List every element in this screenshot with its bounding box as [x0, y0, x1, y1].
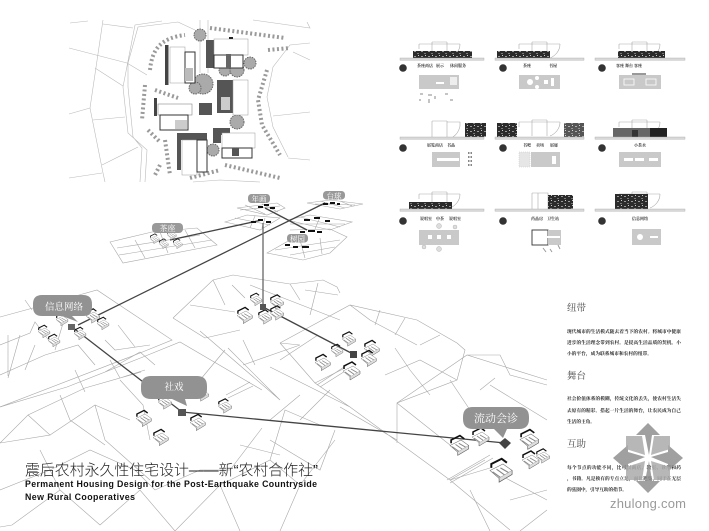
watermark: star: [613, 423, 683, 493]
panel 8: 药品房: [531, 215, 543, 221]
panel 7: [399, 192, 484, 252]
panel 7: 说唱室: [449, 215, 461, 221]
panel 5: 卖场: [536, 142, 544, 148]
text block: 纽带: 纽带: [567, 302, 586, 314]
text block: 舞台: 生活的主角。: [567, 418, 595, 425]
text block: 互助: 每个节点的功能不同，比可以商店、教室、诊所和药: [567, 464, 681, 471]
text block: 互助: 互助: [567, 438, 586, 450]
callout: 台球: 台球: [326, 190, 342, 200]
connection lines: [72, 203, 505, 443]
panel 1: 茶座商店: [417, 62, 433, 68]
cluster: center upper: [237, 293, 284, 324]
cluster: 流动会诊: [450, 428, 550, 482]
clusters: small villages: [150, 203, 340, 249]
callout: 流动会诊: [463, 407, 529, 438]
panel 2: 茶座: [523, 62, 532, 68]
panel 3: 客座 舞台 客座: [616, 62, 643, 68]
text block: 互助: ，书籍。凡是独有的专点立足，而让邀集，同于在无层: [567, 475, 681, 482]
panel 5: 书吧: [523, 142, 531, 148]
site plan: [69, 20, 310, 182]
panel 4: [399, 121, 486, 167]
terrain: main villages: [0, 275, 547, 531]
text block: 纽带: 进步的生活理念带到农村。是提高生活品质的契机。小: [567, 339, 682, 346]
text block: 纽带: 现代城市的生活模式随去着当下的农村。将城市中健康: [567, 328, 681, 335]
callout: 流动会诊: 流动会诊: [474, 411, 518, 425]
text block: 互助: 的弦圈中，引导互助的指节。: [567, 486, 627, 493]
panel 4: 展览商店: [427, 142, 443, 148]
callout: 年画: 年画: [252, 194, 267, 204]
callout: 社戏: [141, 376, 207, 406]
site plan: tree rows: [142, 28, 290, 178]
title: New Rural Cooperatives: [25, 492, 135, 502]
panel 5: 展廊: [550, 142, 558, 148]
callout: 树园: [287, 234, 308, 244]
watermark: text: zhulong.com: [610, 496, 686, 511]
watermark: [610, 423, 686, 511]
panel 2: [495, 42, 584, 89]
site plan: buildings: [154, 37, 255, 175]
text block: 舞台: 去原有的精彩。搭起一片生活的舞台，让农民成为自己: [567, 407, 681, 414]
panel 8: [495, 193, 584, 252]
text block: 纽带: [567, 302, 682, 357]
panel 6: [595, 120, 685, 167]
panel 1: 休闲服务: [450, 62, 466, 68]
text block: 舞台: [567, 370, 681, 425]
site plan: terrain lines: [69, 20, 310, 182]
panel 6: 小茶水: [634, 142, 646, 148]
cluster: 社戏: [136, 387, 232, 446]
callout: 信息网络: [33, 295, 92, 322]
panel 8: 卫生站: [547, 215, 559, 221]
panel 7: 中茶: [436, 215, 444, 221]
title: 震后农村永久性住宅设计——新“农村合作社”: [25, 462, 318, 479]
callout: 年画: [248, 194, 270, 204]
callout: 茶座: 茶座: [160, 223, 176, 233]
text block: 舞台: 社会价值体系的模糊，传统文化的丢失，使农村生活失: [567, 395, 681, 402]
callout: 信息网络: 信息网络: [45, 301, 83, 313]
title: [25, 462, 318, 502]
text block: 纽带: 小的平台，成为联系城市和农村的纽带。: [567, 350, 652, 357]
site plan: tree clusters: [189, 29, 256, 156]
panel 1: 展示: [436, 62, 445, 68]
panel 5: [495, 120, 584, 167]
cluster: right middle: [315, 332, 379, 380]
callouts: [33, 190, 529, 438]
cluster: 信息网络: [38, 309, 109, 347]
road strips: [226, 365, 493, 483]
village clusters: [38, 203, 550, 482]
terrain: small villages: [110, 200, 363, 263]
section panels: [399, 42, 685, 252]
text column: [567, 302, 682, 493]
panel 9: 信息网络: [632, 215, 648, 221]
callout: 茶座: [152, 223, 183, 233]
panel 7: 说唱室: [420, 215, 432, 221]
panel 4: 书品: [447, 142, 455, 148]
panel 9: [595, 192, 685, 245]
callout: 社戏: 社戏: [164, 381, 184, 393]
panel 3: [595, 42, 685, 89]
title: Permanent Housing Design for the Post-Earthquake Countryside: [25, 479, 317, 489]
callout: 台球: [323, 190, 345, 200]
callout: 树园: 树园: [290, 234, 305, 244]
text block: 互助: [567, 438, 681, 493]
panel 2: 书屋: [549, 62, 557, 68]
text block: 舞台: 舞台: [567, 370, 586, 382]
panel 1: [399, 42, 484, 103]
